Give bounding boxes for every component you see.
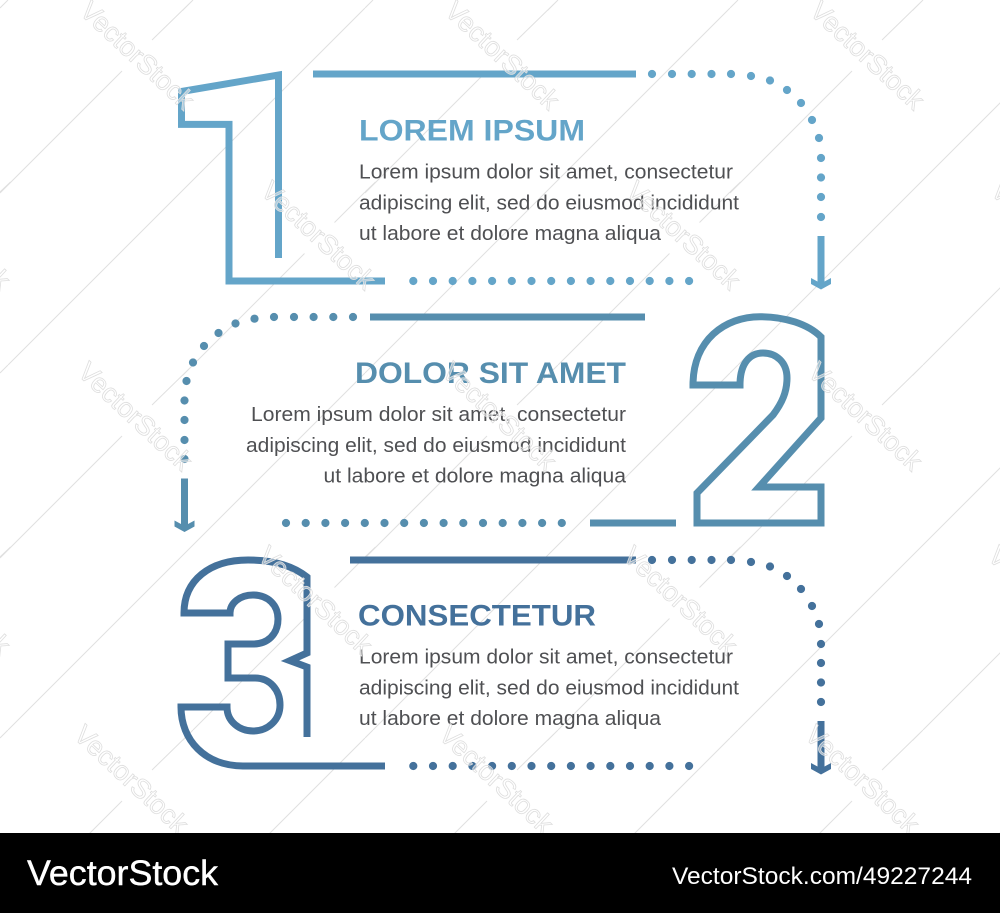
body text: Lorem ipsum dolor sit amet, consectetur bbox=[251, 403, 626, 426]
footer brand: VectorStock bbox=[27, 854, 219, 893]
top rule bbox=[313, 70, 636, 78]
watermarks: VectorStock bbox=[72, 356, 198, 477]
arrow down bbox=[811, 236, 831, 290]
dotted path bottom bbox=[282, 519, 566, 527]
body text: adipiscing elit, sed do eiusmod incididunt bbox=[246, 434, 626, 457]
heading: CONSECTETUR bbox=[358, 600, 596, 632]
body text: ut labore et dolore magna aliqua bbox=[324, 464, 627, 488]
dotted path top right bbox=[648, 556, 825, 706]
footer bar bbox=[0, 833, 1000, 913]
body text: ut labore et dolore magna aliqua bbox=[359, 222, 662, 245]
watermarks: VectorStock bbox=[799, 719, 925, 840]
arrow down bbox=[811, 721, 831, 774]
bottom rule bbox=[590, 520, 676, 526]
body text bbox=[359, 646, 739, 730]
arrow down bbox=[174, 478, 194, 532]
dotted path bottom bbox=[409, 277, 693, 285]
number 1 outline bbox=[182, 75, 385, 281]
watermarks: VectorStock bbox=[68, 719, 194, 840]
watermarks: VectorStock bbox=[252, 540, 378, 661]
dotted path top right bbox=[648, 70, 825, 221]
panel: step 1 bbox=[182, 70, 831, 290]
dotted path top left bbox=[180, 313, 357, 463]
dotted path bottom bbox=[409, 762, 693, 770]
number 3 outline bbox=[181, 560, 385, 766]
panel: step 3 bbox=[181, 556, 831, 774]
body text: Lorem ipsum dolor sit amet, consectetur bbox=[359, 160, 733, 184]
watermarks: VectorStock bbox=[802, 356, 928, 477]
heading: LOREM IPSUM bbox=[359, 114, 585, 148]
watermarks: VectorStock bbox=[620, 175, 746, 296]
number 2 outline bbox=[693, 317, 821, 523]
body text bbox=[246, 403, 627, 488]
body text bbox=[359, 160, 739, 245]
body text: ut labore et dolore magna aliqua bbox=[359, 707, 662, 730]
watermarks: VectorStock bbox=[617, 540, 743, 661]
body text: adipiscing elit, sed do eiusmod incididunt bbox=[359, 192, 739, 214]
watermarks: VectorStock bbox=[436, 356, 562, 477]
panel: step 2 bbox=[174, 313, 821, 532]
watermarks: VectorStock bbox=[433, 719, 559, 840]
watermarks: VectorStock bbox=[255, 175, 381, 296]
body text: adipiscing elit, sed do eiusmod incididunt bbox=[359, 676, 739, 700]
body text: Lorem ipsum dolor sit amet, consectetur bbox=[359, 646, 733, 668]
footer image id: VectorStock.com/49227244 bbox=[672, 863, 972, 890]
top rule bbox=[350, 556, 636, 564]
heading: DOLOR SIT AMET bbox=[355, 357, 626, 390]
top rule bbox=[370, 314, 645, 320]
